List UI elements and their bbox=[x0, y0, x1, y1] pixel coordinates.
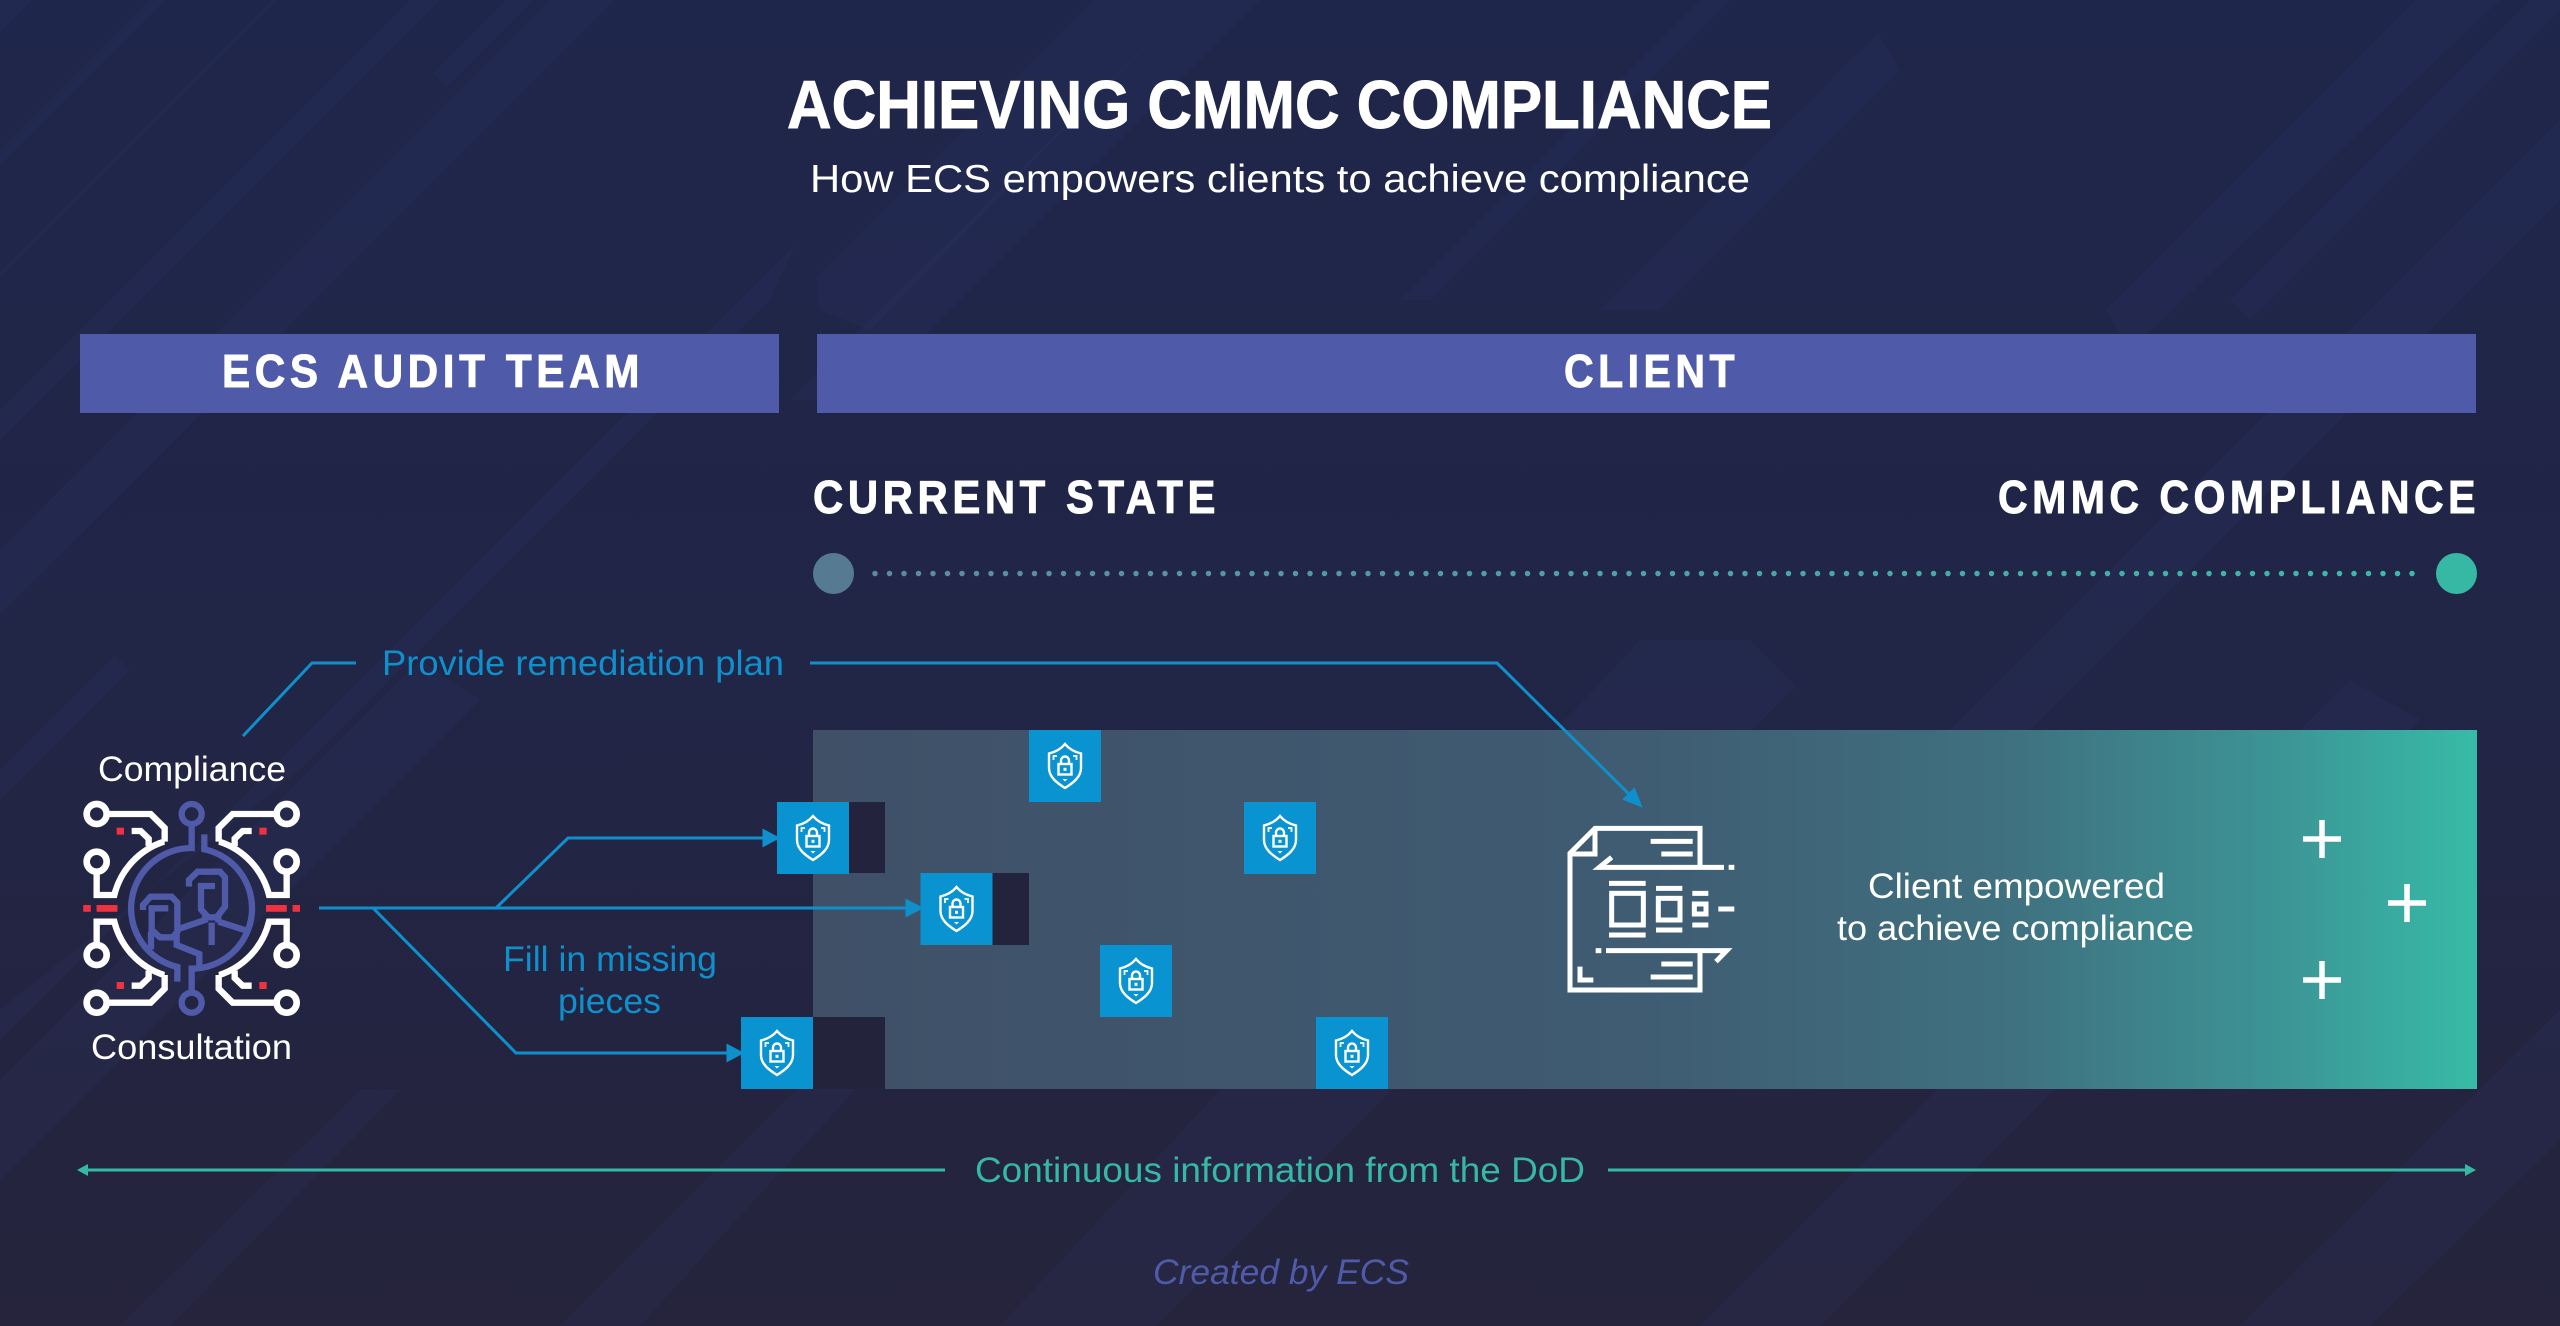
progress timeline bbox=[813, 553, 2477, 594]
icon: compliance consultation circuit bbox=[83, 804, 300, 1013]
header bar: ECS audit team bbox=[80, 334, 779, 413]
credit: Created by ECS bbox=[1153, 1253, 1409, 1292]
header bar: ECS audit team: ECS AUDIT TEAM bbox=[222, 345, 644, 397]
label: compliance: Compliance bbox=[98, 750, 286, 789]
label: provide remediation plan: Provide remediation plan bbox=[382, 644, 784, 683]
label: CMMC compliance: CMMC COMPLIANCE bbox=[1998, 471, 2480, 523]
label: current state: CURRENT STATE bbox=[813, 471, 1220, 523]
label: fill in missing pieces: pieces bbox=[558, 982, 661, 1021]
title: ACHIEVING CMMC COMPLIANCE bbox=[787, 67, 1772, 143]
text: client empowered: to achieve compliance bbox=[1837, 909, 2194, 948]
label: fill in missing pieces bbox=[503, 940, 717, 1021]
arrows: fill in missing pieces connectors bbox=[319, 831, 920, 1060]
text: client empowered: Client empowered bbox=[1868, 867, 2165, 906]
icons: plus signs bbox=[2303, 820, 2426, 999]
shield tiles bbox=[741, 730, 1388, 1089]
text: client empowered bbox=[1837, 867, 2194, 948]
arrow: continuous information, right bbox=[1608, 1164, 2476, 1176]
arrow: continuous information, left bbox=[77, 1164, 945, 1176]
header bar: client bbox=[817, 334, 2476, 413]
subtitle: How ECS empowers clients to achieve compliance bbox=[810, 158, 1750, 201]
label: continuous information from the DoD: Continuous information from the DoD bbox=[975, 1151, 1585, 1190]
client panel: gradient from current state to compliance bbox=[813, 730, 2477, 1089]
header bar: client: CLIENT bbox=[1564, 345, 1739, 397]
label: fill in missing pieces: Fill in missing bbox=[503, 940, 717, 979]
arrow: provide remediation plan connector bbox=[243, 663, 1640, 805]
icon: document bbox=[1570, 828, 1734, 990]
label: consultation: Consultation bbox=[91, 1028, 292, 1067]
